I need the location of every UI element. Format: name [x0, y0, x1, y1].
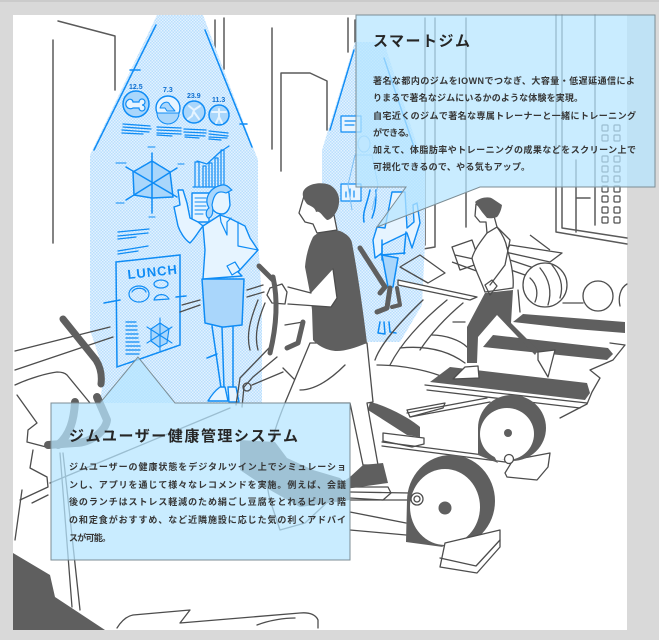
radar chart [116, 147, 184, 217]
shirt [305, 230, 367, 351]
hologram: health management display [90, 15, 262, 403]
weight shelf [452, 235, 562, 275]
shorts [202, 279, 244, 327]
left handle bars [259, 266, 303, 353]
body text: ができる。 [373, 127, 414, 138]
hair [475, 197, 502, 218]
exercise ball [523, 263, 567, 307]
shoes [208, 387, 239, 402]
hair [303, 183, 339, 220]
treadmills and equipment in back [375, 235, 627, 418]
medicine balls [563, 281, 627, 311]
lower frame curve [117, 610, 318, 628]
small radar [147, 318, 172, 351]
callout: smart gym [356, 15, 655, 227]
gym wall and window lines [53, 15, 627, 252]
leggings [467, 290, 538, 363]
meal icons [129, 280, 169, 302]
body text: 可視化できるので、やる気もアップ。 [373, 161, 530, 172]
hand [267, 284, 287, 304]
rails [15, 285, 264, 610]
body text: 著名な都内のジムをIOWNでつなぎ、大容量・低遅延通信によ [373, 75, 635, 86]
shoe [338, 463, 388, 489]
body text: 自宅近くのジムで著名な専属トレーナーと一緒にトレーニング [373, 110, 636, 121]
center elliptical machine [236, 300, 550, 573]
heading: ジムユーザー健康管理システム [69, 427, 298, 445]
treadmill belt middle [483, 335, 613, 360]
rear foot under callout [240, 440, 350, 507]
callout: gym user health management system [51, 357, 350, 560]
metric values: 11.3 [212, 97, 225, 104]
arm [285, 269, 337, 307]
small document [192, 193, 209, 222]
head [475, 204, 497, 233]
body text: 後のランチはストレス軽減のため絹ごし豆腐をとれるビル３階 [69, 496, 346, 507]
metric values [129, 84, 225, 104]
head [299, 196, 337, 233]
bar chart [193, 146, 229, 187]
control panel buttons [602, 125, 620, 223]
trainer figure [348, 136, 420, 334]
hologram field [322, 42, 425, 342]
handle [48, 319, 107, 445]
metric values: 12.5 [129, 84, 143, 91]
right handle bars [360, 248, 400, 312]
body text [373, 75, 636, 172]
metric values: 23.9 [187, 93, 201, 100]
front wheel [406, 455, 500, 573]
treadmill structure lines [375, 255, 625, 418]
shirt [203, 215, 258, 279]
body text: ジムユーザーの健康状態をデジタルツイン上でシミュレーショ [69, 461, 346, 472]
health metric icons [123, 91, 229, 125]
label: LUNCH: LUNCH [127, 262, 179, 282]
treadmill belt front [430, 367, 590, 400]
body text: 加えて、体脂肪率やトレーニングの成果などをスクリーン上で [373, 144, 636, 155]
hologram woman trainer [174, 185, 258, 402]
frame [236, 300, 303, 407]
pedal left [368, 402, 420, 437]
rods [350, 398, 507, 535]
hologram: smart gym remote trainer [322, 42, 425, 342]
body text: の和定食がおすすめ、など近隣施設に応じた気の利くアドバイ [69, 514, 346, 525]
arm pointing [174, 190, 203, 243]
floating panels [341, 116, 361, 201]
treadmill belt back [513, 314, 625, 333]
dark base shape [13, 553, 105, 630]
callout box [356, 15, 655, 227]
shirt [472, 227, 513, 292]
shorts and legs [267, 343, 378, 530]
man exercising [240, 183, 400, 530]
heading: スマートジム [373, 33, 470, 50]
callout box [51, 357, 350, 560]
body text: ンし、アプリを通じて様々なレコメンドを実施。例えば、会議 [69, 479, 346, 490]
woman running on treadmill [453, 197, 555, 379]
metric values: 7.3 [163, 87, 173, 94]
lunch recommendation board [104, 255, 186, 367]
shoes [453, 350, 555, 379]
head and hair [211, 190, 230, 214]
hologram edge lines [330, 50, 415, 150]
metric description lines [122, 124, 228, 140]
text lines [118, 229, 149, 254]
board text lines [126, 322, 140, 354]
back wheel [478, 395, 550, 480]
left foreground elliptical machine [13, 285, 318, 630]
body text: りまるで著名なジムにいるかのような体験を実現。 [373, 92, 583, 103]
legs [212, 326, 233, 388]
pedal plate [383, 433, 424, 447]
hologram field [90, 15, 262, 403]
hologram edge lines [94, 25, 252, 150]
body text [69, 461, 346, 543]
body text: スが可能。 [69, 532, 111, 543]
